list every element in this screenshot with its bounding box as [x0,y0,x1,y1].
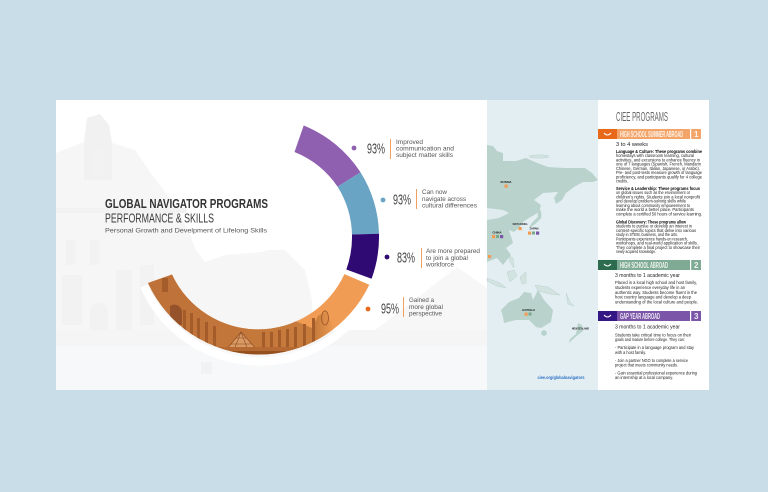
panel: CIEE programs [598,100,709,390]
stat: 93% communication: communication and [396,145,454,152]
program details: high school abroad: 3 months to 1 academic year [615,273,680,279]
stat: 93% cultural differences: cultural differences [422,202,477,209]
program header: Gap Year Abroad: GAP YEAR ABROAD [620,312,660,321]
website link: ciee.org/globalnavigators [538,375,585,380]
panel: CIEE programs: CIEE PROGRAMS [616,110,668,124]
program details: gap year: goals and mature before college. They can: [615,337,685,342]
title block [105,197,268,235]
program details: summer abroad: content-specific topics that delve into various [616,228,696,233]
program details: summer abroad: learning about community empowerment to [616,203,691,208]
program details: summer abroad: make the world a better place. Participants [616,207,694,212]
program details: summer abroad: Pre- and post-tests measure growth of language [616,170,703,175]
program details: summer abroad: newly acquired knowledge. [616,249,656,254]
program details: summer abroad: workshops, and real-world application of skills. [616,241,698,246]
heading: GLOBAL NAVIGATOR PROGRAMS [105,197,268,211]
program details: summer abroad: complete a certified 50 hours of service learning. [616,212,702,216]
stat: 83% global workforce: to join a global [426,255,468,262]
stat: 93% cultural differences: navigate across [422,196,466,203]
program details: summer abroad: children's rights. Students join a local nonprofit [616,194,701,200]
background photo: Louvre building [56,114,487,390]
panel: map [487,100,598,390]
panel: performance and skills [56,100,487,390]
country label: Australia: AUSTRALIA [522,308,536,312]
country label: China: CHINA [492,230,502,234]
program details: gap year: project that meets community needs. [615,363,678,368]
tagline: Personal Growth and Develpment of Lifelong Skills [105,228,267,235]
program details: summer abroad: Global Discovery: These programs allow [616,220,687,224]
stat: 93% cultural differences [381,189,477,209]
program details: high school abroad: students experience everyday life in an [615,285,686,290]
program details: summer abroad: Participants experience hands-on research, [616,236,688,242]
program details: gap year: with a host family. [615,350,646,355]
country label: Russia: RUSSIA [500,180,512,184]
program details: summer abroad: Service & Leadership: These programs focus [616,186,701,191]
program details: high school abroad: authentic way. Students become fluent in the [615,290,698,295]
program details: summer abroad: Chinese, German, Italian, Japanese, or Arabic). [616,166,700,171]
infographic canvas [56,100,709,390]
map: Pacific islands [487,155,574,336]
donut chart [140,126,379,365]
program details: gap year: - Join a partner NGO to complete a service [615,358,689,363]
stat: 95% global perspective: 95% [381,300,399,318]
map: Asia landmass [487,145,598,265]
map: inland region [487,208,509,220]
map: Australia [501,290,553,328]
segment: communication 93% [294,126,360,187]
program header: High School Summer Abroad: 1 [694,130,699,139]
program details: high school abroad: host country language and develop a deep [615,295,692,300]
country label: China [488,230,503,258]
program details: summer abroad: students to pursue or develop an interest in [616,224,693,229]
stat: 83% global workforce: Are more prepared [426,248,480,255]
stat: 83% global workforce: workforce [425,261,454,268]
country label: South Korea: SOUTH KOREA [512,222,528,226]
stat: 95% global perspective: Gained a [409,297,434,304]
program header: High School Abroad [598,260,701,270]
stat: 83% global workforce [385,248,480,268]
program details: summer abroad: Language & Culture: These programs combine [616,149,703,154]
program details: gap year: an internship at a local company. [615,375,673,380]
country label: Australia [522,308,536,316]
program header: High School Summer Abroad: HIGH SCHOOL SUMMER ABROAD [620,130,683,139]
segment: global workforce 83% [346,234,379,279]
country label: South Korea [512,222,528,230]
stat: 83% global workforce: 83% [397,250,415,266]
country label: New Zealand: NEW ZEALAND [572,326,589,330]
program details: summer abroad: 3 to 4 weeks [616,142,649,148]
program header: Gap Year Abroad: 3 [694,312,699,321]
program details: summer abroad: activities, and excursions to enhance fluency in [616,158,701,162]
program details: summer abroad: homestays with classroom learning, cultural [616,153,694,158]
segment: cultural differences 93% [338,172,379,234]
stat: 93% cultural differences: Can now [422,189,447,196]
segment: global perspective 95% [148,274,369,354]
program details: summer abroad [616,142,703,254]
program details: gap year: - Participate in a language program and stay [615,345,695,350]
program details: summer abroad: proficiency, and participants qualify for 4 college [616,174,703,180]
stat: 93% cultural differences: 93% [393,192,411,208]
program details: gap year: 3 months to 1 academic year [615,324,680,330]
stat: 93% communication [352,139,454,159]
map: New Zealand [569,323,583,343]
stat: 95% global perspective: more global [409,304,443,311]
stat: 95% global perspective [366,297,443,318]
program details: summer abroad: They complete a final project to showcase their [616,245,701,250]
program details: gap year [615,324,698,380]
program details: high school abroad [615,273,698,304]
program details: high school abroad: understanding of the local culture and people. [615,299,698,304]
program details: gap year: Students take critical time to focus on their [615,332,692,338]
white halo around ring [144,286,374,362]
stat: 95% global perspective: perspective [409,311,442,318]
program details: summer abroad: study in STEM, business, and the arts. [616,232,678,237]
program details: gap year: - Gain essential professional experience during [615,371,698,376]
country label: Japan [528,226,539,235]
program details: summer abroad: and develop problem-solving skills while [616,199,687,204]
program details: summer abroad: on global issues such as the environment or [616,190,690,195]
stat: 93% communication: 93% [367,140,385,158]
program header: High School Abroad: HIGH SCHOOL ABROAD [620,261,668,270]
country label: Russia [500,180,512,188]
country label: Japan: JAPAN [530,226,538,230]
program header: Gap Year Abroad [598,311,701,321]
program header: High School Summer Abroad [598,129,701,139]
stat: 93% communication: Improved [396,139,423,146]
stat: 93% communication: subject matter skills [396,152,453,159]
program details: high school abroad: Placed in a local high school and host family, [615,280,697,285]
program details: summer abroad: one of 7 languages (Spanish, French, Mandarin [616,162,702,167]
program details: summer abroad: credits. [616,179,628,184]
program header: High School Abroad: 2 [694,261,699,270]
subheading: PERFORMANCE & SKILLS [105,212,214,226]
photo texture in ring [148,274,334,354]
